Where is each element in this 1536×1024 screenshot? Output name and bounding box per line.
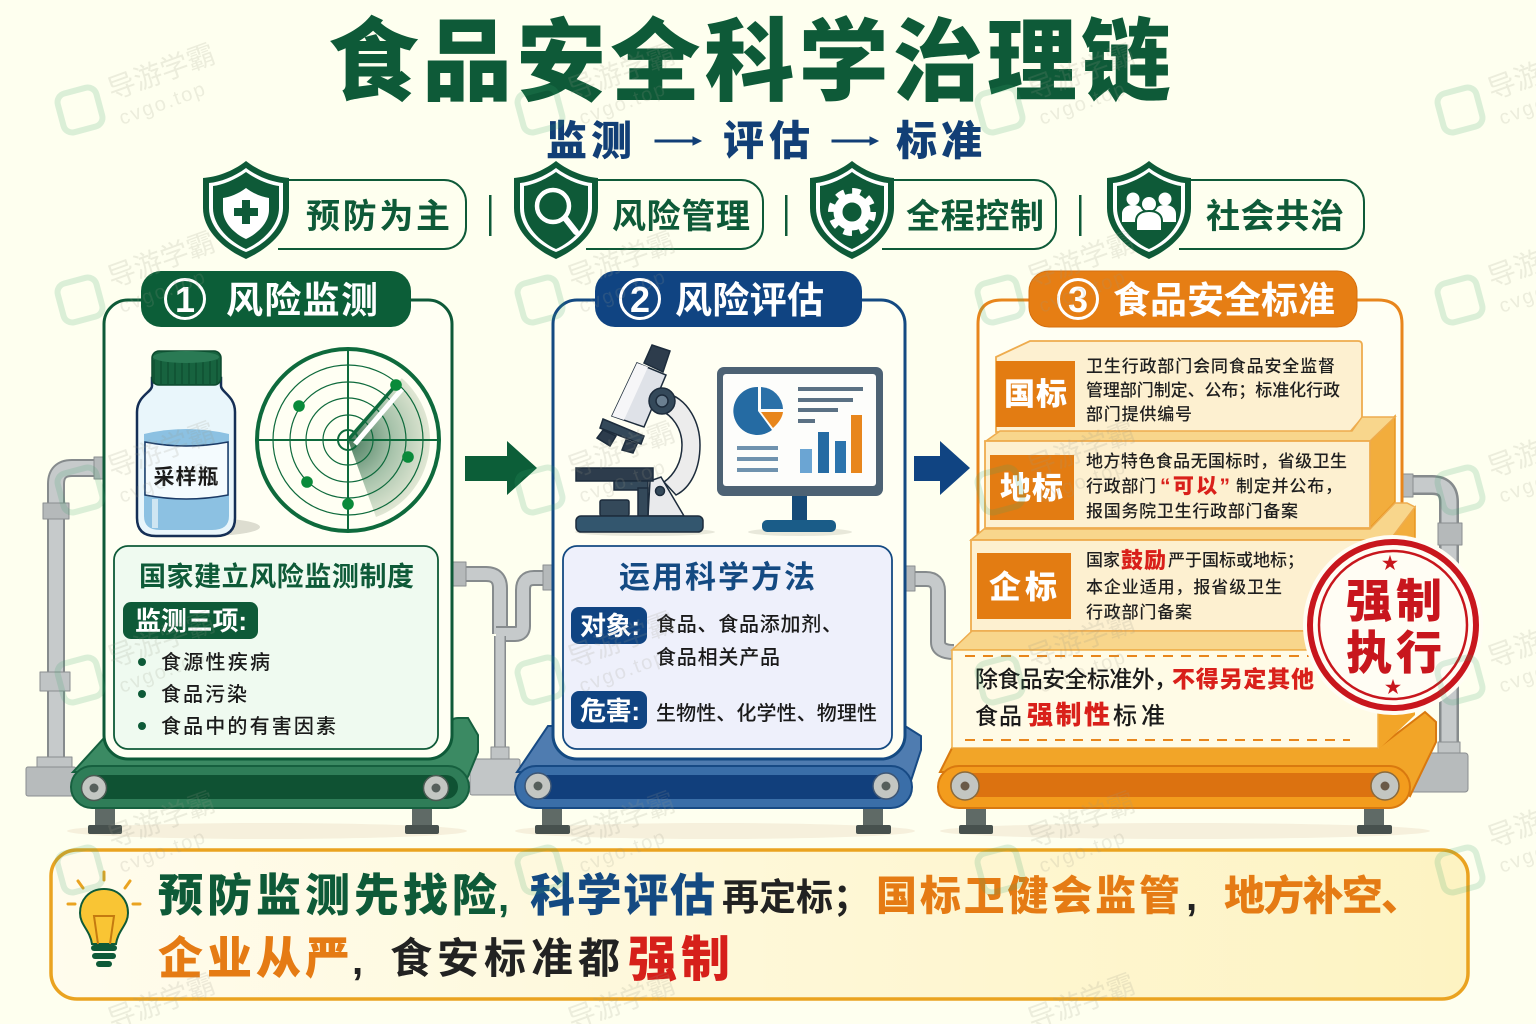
middle pipe between panels one and two (452, 562, 553, 795)
summary line two: , (352, 939, 363, 983)
watermarks: 导游学霸 (103, 38, 219, 106)
tier: enterprise standard: 企标 (989, 569, 1057, 605)
summary line one (158, 870, 1422, 921)
title: 食品安全科学治理链 (328, 13, 1171, 113)
tier: local standard: 行政部门 (1086, 477, 1156, 496)
watermarks: 导游学霸 (103, 226, 219, 294)
heading: food safety standards: 食品安全标准 (1113, 280, 1335, 321)
subtitle: monitor evaluate standard: 评估 (723, 118, 810, 164)
text box: national monitoring system: 食品中的有害因素 (161, 715, 336, 738)
watermarks: cvgo.top (576, 78, 670, 130)
text box: national monitoring system: 监测三项: (135, 606, 247, 636)
conveyor: green (67, 718, 478, 839)
panel 1: risk monitoring (104, 271, 452, 759)
label: target (571, 607, 647, 644)
tier: enterprise standard: 国家 (1086, 550, 1120, 570)
tier: base statement: 食品 (975, 703, 1022, 729)
watermarks: cvgo.top (1036, 78, 1130, 130)
summary line two (158, 933, 730, 987)
watermarks: 导游学霸 (563, 416, 679, 484)
tier: enterprise standard: 行政部门备案 (1086, 603, 1192, 622)
watermarks: cvgo.top (116, 78, 210, 130)
tier: base statement: 强制性 (1027, 700, 1110, 730)
tier: local standard: 制定并公布， (1236, 476, 1342, 496)
summary line two: 强制 (628, 933, 730, 987)
text box: national monitoring system: 国家建立风险监测制度 (139, 561, 414, 592)
conveyor: orange (938, 712, 1436, 839)
arrow: blue (914, 441, 970, 495)
watermarks: 导游学霸 (1023, 38, 1139, 106)
principle: whole-process control (810, 161, 1056, 259)
tier: national standard: 部门提供编号 (1086, 405, 1192, 424)
summary line one: 地方补空、 (1224, 873, 1422, 919)
stamp: mandatory enforcement (1303, 535, 1483, 715)
watermarks: 导游学霸 (103, 416, 219, 484)
summary line one: 预防监测先找险 (158, 870, 497, 921)
icon: monitor with charts (717, 367, 883, 536)
text box: scientific methods: 食品、食品添加剂、 (656, 613, 842, 636)
icon: microscope (575, 345, 715, 536)
tier: base statement: 不得另定其他 (1172, 666, 1314, 692)
text box: scientific methods: 生物性、化学性、物理性 (656, 702, 877, 725)
arrow: green (465, 441, 537, 495)
tier: local standard (985, 416, 1395, 528)
principle: risk management (514, 161, 763, 259)
watermarks: cvgo.top (116, 266, 210, 318)
pipe between panels two and three (905, 566, 954, 652)
tier: local standard: 报国务院卫生行政部门备案 (1086, 502, 1298, 521)
heading: risk monitoring: 风险监测 (226, 280, 378, 321)
icon: shield gear (810, 161, 894, 259)
stamp: mandatory enforcement: 执行 (1346, 627, 1442, 679)
principle: prevention: 预防为主 (306, 198, 450, 236)
principle: whole-process control: 全程控制 (906, 198, 1044, 236)
watermarks: cvgo.top (576, 646, 670, 698)
tier: national standard: 国标 (1004, 377, 1067, 412)
watermarks: cvgo.top (116, 646, 210, 698)
tier: national standard: 卫生行政部门会同食品安全监督 (1086, 356, 1335, 376)
principle: social co-governance (1107, 161, 1364, 259)
right pipe (1402, 474, 1468, 792)
principle: risk management: 风险管理 (612, 198, 750, 236)
watermarks: 导游学霸 (1023, 416, 1139, 484)
summary line one: 科学评估 (530, 870, 715, 921)
heading: risk assessment: 风险评估 (675, 280, 824, 321)
tier: local standard: “可以” (1160, 475, 1230, 498)
heading: risk monitoring (141, 271, 411, 327)
icon: sample bottle: 采样瓶 (154, 466, 218, 489)
tier: base statement: 除食品安全标准外， (975, 666, 1177, 692)
tier: enterprise standard: 鼓励 (1121, 548, 1166, 573)
watermarks: cvgo.top (1036, 266, 1130, 318)
watermarks: cvgo.top (116, 456, 210, 508)
watermarks: 导游学霸 (103, 786, 219, 854)
stamp: mandatory enforcement: 强制 (1346, 575, 1442, 627)
heading: risk assessment (595, 271, 862, 327)
watermarks: 导游学霸 (563, 38, 679, 106)
heading: food safety standards: 3 (1068, 279, 1088, 320)
heading: risk assessment: 2 (630, 279, 650, 320)
tier: national standard: 管理部门制定、公布；标准化行政 (1086, 380, 1340, 400)
watermarks: cvgo.top (1036, 456, 1130, 508)
tier: base statement: 标准 (1113, 703, 1165, 730)
icon: shield magnifier (514, 161, 598, 259)
subtitle: monitor evaluate standard: 标准 (896, 118, 982, 164)
text box: scientific methods: 运用科学方法 (619, 560, 815, 595)
tier: enterprise standard: 本企业适用，报省级卫生 (1086, 577, 1282, 597)
tier: national standard (996, 341, 1362, 432)
text box: scientific methods (563, 546, 892, 749)
watermarks: cvgo.top (576, 456, 670, 508)
tier: base statement (952, 620, 1415, 750)
text box: scientific methods: 食品相关产品 (656, 646, 780, 669)
stamp: mandatory enforcement: ★ (1384, 678, 1402, 697)
principle: social co-governance: 社会共治 (1206, 198, 1344, 236)
tier: local standard: 地方特色食品无国标时，省级卫生 (1086, 451, 1347, 471)
icon: light bulb (68, 872, 140, 967)
subtitle: monitor evaluate standard (546, 118, 982, 164)
text box: national monitoring system (114, 546, 438, 749)
left pipe (26, 457, 105, 796)
watermarks: cvgo.top (1036, 646, 1130, 698)
label: hazard: 危害: (580, 696, 640, 726)
watermarks: 导游学霸 (1023, 606, 1139, 674)
summary line two: 食安标准都 (390, 935, 620, 982)
heading: food safety standards (1029, 271, 1357, 327)
tier: enterprise standard: 严于国标或地标； (1168, 551, 1304, 570)
watermarks: 导游学霸 (1023, 786, 1139, 854)
watermarks: 导游学霸 (103, 606, 219, 674)
panel 3: food safety standards (952, 271, 1415, 750)
icon: radar (257, 349, 439, 531)
pipes: connecting the stations (26, 457, 1468, 796)
watermarks: cvgo.top (116, 826, 210, 878)
principle: prevention (203, 161, 466, 259)
subtitle: monitor evaluate standard: 监测 (546, 118, 632, 164)
tier: enterprise standard (971, 503, 1415, 631)
icon: sample bottle (137, 351, 260, 536)
label: target: 对象: (580, 611, 640, 641)
panel 2: risk assessment (553, 271, 905, 759)
label: hazard (571, 691, 647, 729)
summary line two: 企业从严 (158, 933, 350, 984)
text box: national monitoring system: 食源性疾病 (161, 651, 270, 674)
watermarks: 导游学霸 (563, 606, 679, 674)
summary line one: 国标卫健会监管 (876, 873, 1180, 919)
watermarks: 导游学霸 (563, 786, 679, 854)
heading: risk monitoring: 1 (175, 279, 195, 320)
summary line one: , (1186, 875, 1197, 919)
watermarks: 导游学霸 (1023, 226, 1139, 294)
conveyor: blue (515, 726, 921, 839)
watermarks: cvgo.top (1036, 826, 1130, 878)
watermarks: 导游学霸 (563, 226, 679, 294)
icon: shield plus (203, 161, 289, 259)
icon: shield people (1107, 161, 1191, 259)
summary line one: , (498, 876, 509, 920)
tier: local standard: 地标 (1000, 471, 1063, 506)
stamp: mandatory enforcement: ★ (1382, 554, 1398, 573)
watermarks: cvgo.top (576, 266, 670, 318)
watermarks: cvgo.top (576, 826, 670, 878)
text box: national monitoring system: 食品污染 (161, 683, 247, 706)
summary line one: 再定标； (722, 877, 870, 918)
summary banner (51, 850, 1468, 999)
